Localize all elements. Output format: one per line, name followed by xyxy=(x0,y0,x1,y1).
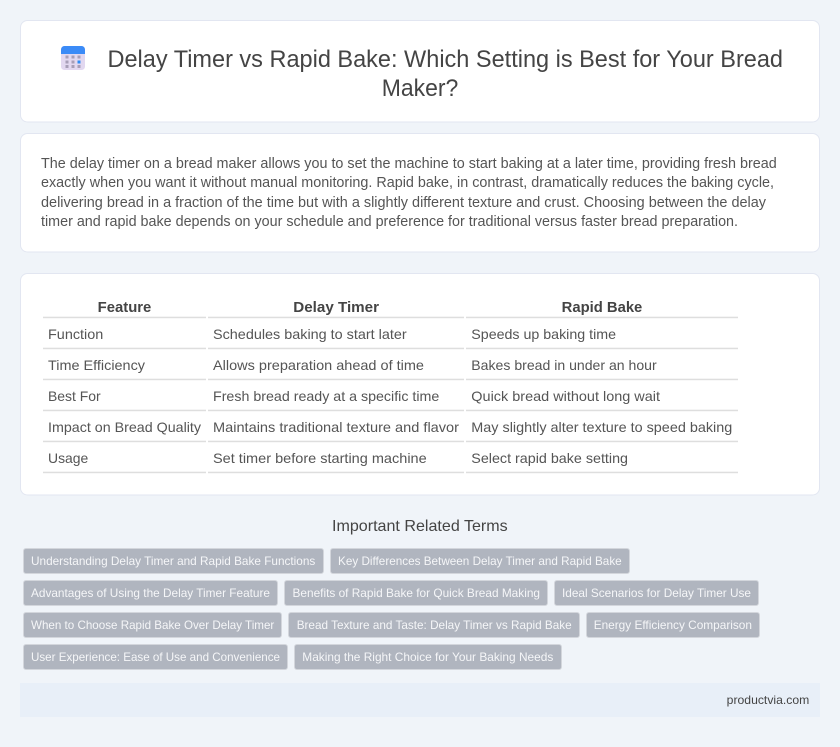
table row: Function: Schedules baking to start later xyxy=(213,326,407,342)
table row: Function: Speeds up baking time xyxy=(471,326,616,342)
icon: calendar xyxy=(61,46,85,70)
tag: Bread Texture and Taste: Delay Timer vs Rapid Bake xyxy=(297,618,572,632)
panel: related term tags xyxy=(24,548,760,670)
table row: Usage: Set timer before starting machine xyxy=(213,450,427,466)
table row: Time Efficiency: Allows preparation ahead of time xyxy=(213,357,424,373)
panel: introduction xyxy=(20,134,820,252)
tag xyxy=(330,548,630,574)
table row: Impact on Bread Quality: May slightly alter texture to speed baking xyxy=(471,419,732,435)
tag: Making the Right Choice for Your Baking Needs xyxy=(302,650,553,664)
tag: Benefits of Rapid Bake for Quick Bread Making xyxy=(292,586,540,600)
tag: Advantages of Using the Delay Timer Feature xyxy=(31,586,270,600)
table row: Best For: Best For xyxy=(48,388,101,404)
tag xyxy=(294,644,562,670)
text block: intro paragraph: exactly when you want it without manual monitoring. Rapid bake, in contrast, dramatically reduces the baking cycle, xyxy=(41,175,774,191)
tag: Energy Efficiency Comparison xyxy=(594,618,752,632)
footer xyxy=(20,683,820,717)
table row: Usage: Usage xyxy=(48,450,89,466)
tag xyxy=(554,580,758,606)
text block: intro paragraph: delivering bread in a fraction of the time but with a slightly different texture and crust. Choosing between the delay xyxy=(41,195,767,211)
table row: Function: Function xyxy=(48,326,103,342)
panel: comparison table xyxy=(20,274,820,495)
table row: Time Efficiency: Time Efficiency xyxy=(48,357,145,373)
panel: header xyxy=(20,20,820,122)
table header row: Delay Timer xyxy=(293,300,379,316)
table header row: Feature xyxy=(98,300,151,316)
table row: Impact on Bread Quality: Impact on Bread Quality xyxy=(48,419,201,435)
tag xyxy=(288,612,580,638)
text block: intro paragraph: timer and rapid bake depends on your schedule and preference for traditional versus faster bread preparation. xyxy=(41,214,738,230)
table row: Time Efficiency xyxy=(43,357,738,380)
title: Maker? xyxy=(382,75,458,102)
table row: Usage: Select rapid bake setting xyxy=(471,450,628,466)
text block: intro paragraph xyxy=(41,156,777,230)
table row: Best For: Quick bread without long wait xyxy=(471,388,660,404)
tag xyxy=(24,548,324,574)
title xyxy=(108,46,783,102)
table row: Time Efficiency: Bakes bread in under an hour xyxy=(471,357,657,373)
table header row: Rapid Bake xyxy=(562,300,642,316)
tag xyxy=(24,644,288,670)
table row: Usage xyxy=(43,450,738,473)
table row: Best For: Fresh bread ready at a specific time xyxy=(213,388,440,404)
tag: Understanding Delay Timer and Rapid Bake Functions xyxy=(31,554,315,568)
tag xyxy=(24,612,282,638)
tag: User Experience: Ease of Use and Convenience xyxy=(31,650,280,664)
text block: intro paragraph: The delay timer on a bread maker allows you to set the machine to start baking at a later time, providing fresh bread xyxy=(41,156,777,172)
table row: Best For xyxy=(43,388,738,411)
tag: Ideal Scenarios for Delay Timer Use xyxy=(562,586,751,600)
table row: Impact on Bread Quality xyxy=(43,419,738,442)
table header row xyxy=(43,300,738,318)
footer source text: productvia.com xyxy=(727,693,809,707)
heading: important related terms: Important Related Terms xyxy=(332,518,508,535)
tag xyxy=(24,580,278,606)
table row: Impact on Bread Quality: Maintains traditional texture and flavor xyxy=(213,419,459,435)
title: Delay Timer vs Rapid Bake: Which Setting is Best for Your Bread xyxy=(108,46,783,73)
tag: Key Differences Between Delay Timer and Rapid Bake xyxy=(338,554,622,568)
tag: When to Choose Rapid Bake Over Delay Timer xyxy=(31,618,274,632)
tag xyxy=(586,612,760,638)
table row: Function xyxy=(43,326,738,349)
tag xyxy=(284,580,548,606)
